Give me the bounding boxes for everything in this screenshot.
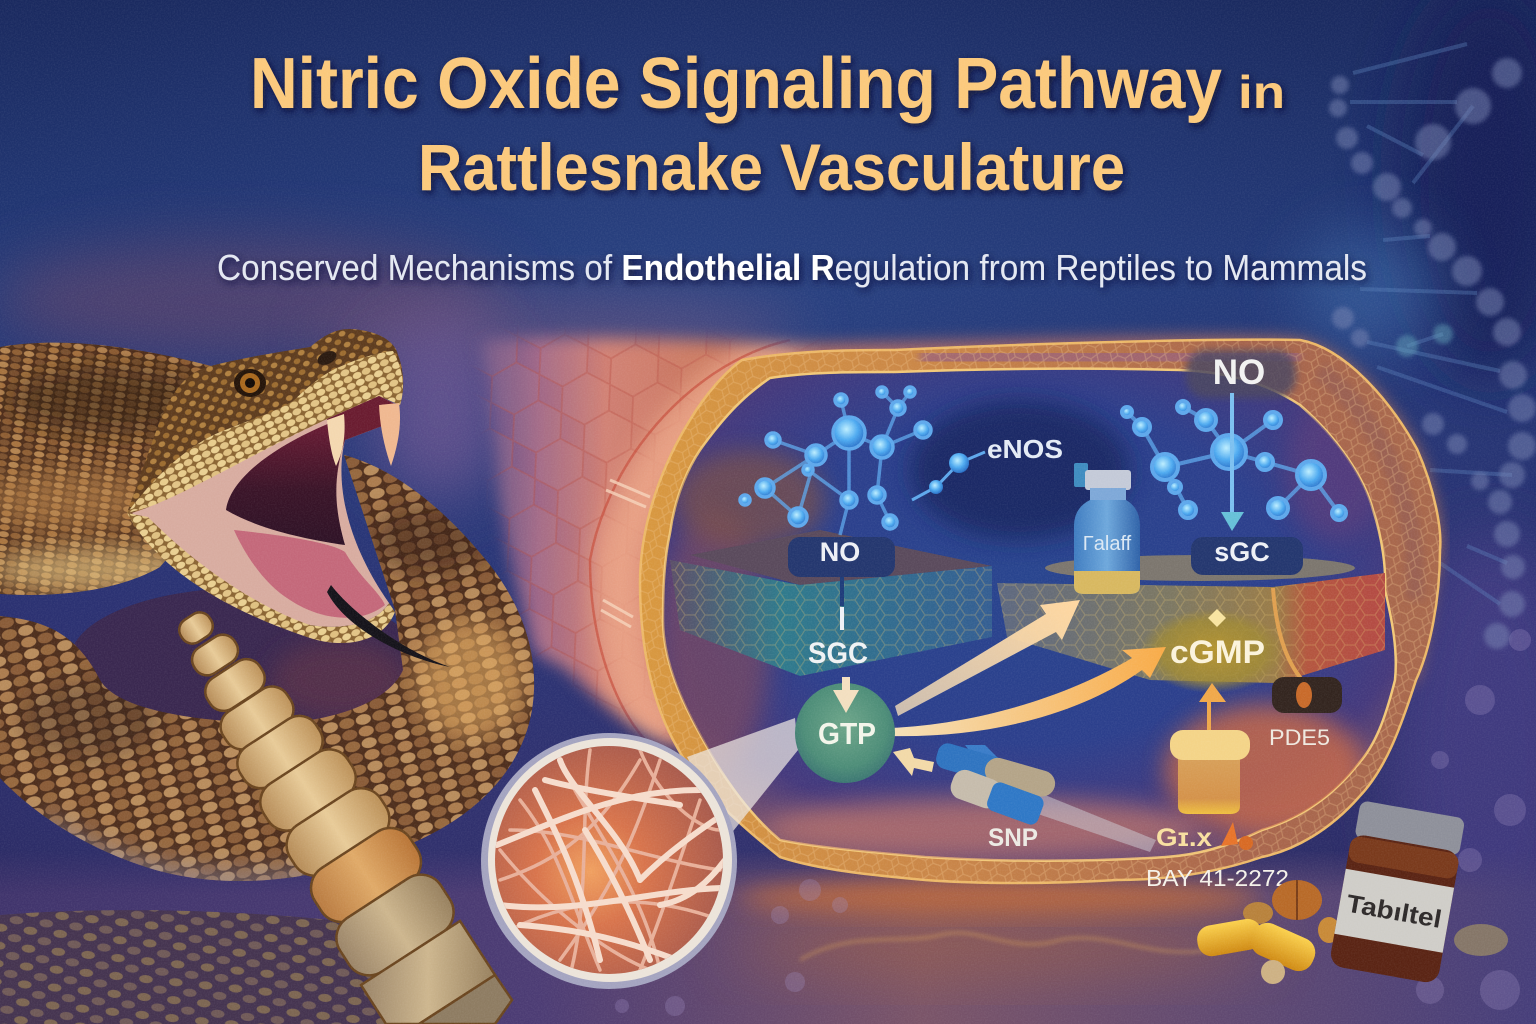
DNA rungs xyxy=(1350,44,1512,604)
vessel wall xyxy=(460,320,1450,760)
nostril xyxy=(315,348,339,368)
arrow: GTP to cGMP xyxy=(890,647,1166,736)
DNA beads xyxy=(1329,58,1536,649)
BAY 41-2272 label: BAY 41-2272 xyxy=(1146,865,1289,891)
sGC label: right xyxy=(1191,537,1303,575)
title: Rattlesnake Vasculature xyxy=(418,130,1125,204)
eye xyxy=(234,369,266,397)
background bokeh dots xyxy=(615,629,1531,1016)
Gl.x label xyxy=(1156,822,1253,852)
magnified fibers inset xyxy=(481,733,737,989)
sGC label: left: SGC xyxy=(808,637,868,670)
cup xyxy=(1170,730,1250,814)
arrow: GTP to vial xyxy=(895,600,1080,716)
tissue slab: left xyxy=(670,530,992,676)
title: Nitric Oxide Signaling Pathway xyxy=(250,44,1222,124)
sGC label: left xyxy=(808,577,868,670)
lower jaw xyxy=(127,513,395,643)
pills xyxy=(1195,880,1508,984)
snake: lower background coil xyxy=(0,910,480,1024)
upper head top xyxy=(127,329,403,513)
molecule network: right xyxy=(1122,401,1346,520)
lumen xyxy=(663,369,1396,861)
cGMP node: cGMP xyxy=(1170,634,1265,670)
lumen shading xyxy=(660,400,1385,858)
DNA helix, top right xyxy=(1329,44,1536,649)
snake: head xyxy=(127,329,450,667)
Gl.x label: Gɪ.x xyxy=(1156,824,1212,852)
arrow: NO to sGC xyxy=(1221,393,1244,531)
NO label: left: NO xyxy=(820,537,860,567)
forked tongue tip xyxy=(327,585,450,667)
pale lip scales xyxy=(127,351,403,513)
NO label: top right: NO xyxy=(1213,353,1265,392)
PDE5 icon xyxy=(1272,677,1342,713)
GTP node xyxy=(795,683,895,783)
subtitle: Conserved Mechanisms of Endothelial Regulation from Reptiles to Mammals xyxy=(217,247,1367,288)
medicine jar: Tabıltel xyxy=(1344,890,1444,934)
snake: neck and upper body xyxy=(0,342,211,595)
eNOS link and label xyxy=(912,434,1063,500)
dark hollow inside the coil xyxy=(70,588,420,732)
fangs xyxy=(379,403,400,466)
mouth lining xyxy=(132,396,397,627)
SNP label: SNP xyxy=(988,824,1038,852)
vial xyxy=(1074,463,1140,594)
magnifier beam xyxy=(687,718,798,835)
medicine jar xyxy=(1329,800,1466,984)
tissue slab: right xyxy=(997,555,1385,683)
arrow: cup to cGMP xyxy=(1199,683,1226,733)
arrow: sGC to GTP xyxy=(833,677,859,713)
PDE5 link curve xyxy=(1273,588,1303,681)
cGMP node xyxy=(1140,609,1284,693)
tongue xyxy=(234,530,385,618)
rim tint and texture xyxy=(630,335,1450,890)
mouth interior xyxy=(226,423,345,545)
SNP capsules xyxy=(893,741,1156,852)
title: in xyxy=(1238,66,1285,118)
NO label: left xyxy=(788,537,895,577)
GTP node: GTP xyxy=(818,716,876,751)
golden rim band xyxy=(640,340,1440,883)
blood vessel xyxy=(460,320,1450,890)
NO label: top right xyxy=(1186,350,1296,398)
molecule network: left xyxy=(740,387,931,535)
mouth roof xyxy=(327,396,397,450)
PDE5 label: PDE5 xyxy=(1269,725,1330,750)
snake: coiled body xyxy=(0,455,534,900)
vial: Γalaff xyxy=(1083,533,1132,555)
snake: rattle xyxy=(175,608,512,1024)
title xyxy=(250,44,1285,204)
sGC label: right: sGC xyxy=(1214,537,1270,567)
eNOS link and label: eNOS xyxy=(987,434,1063,464)
